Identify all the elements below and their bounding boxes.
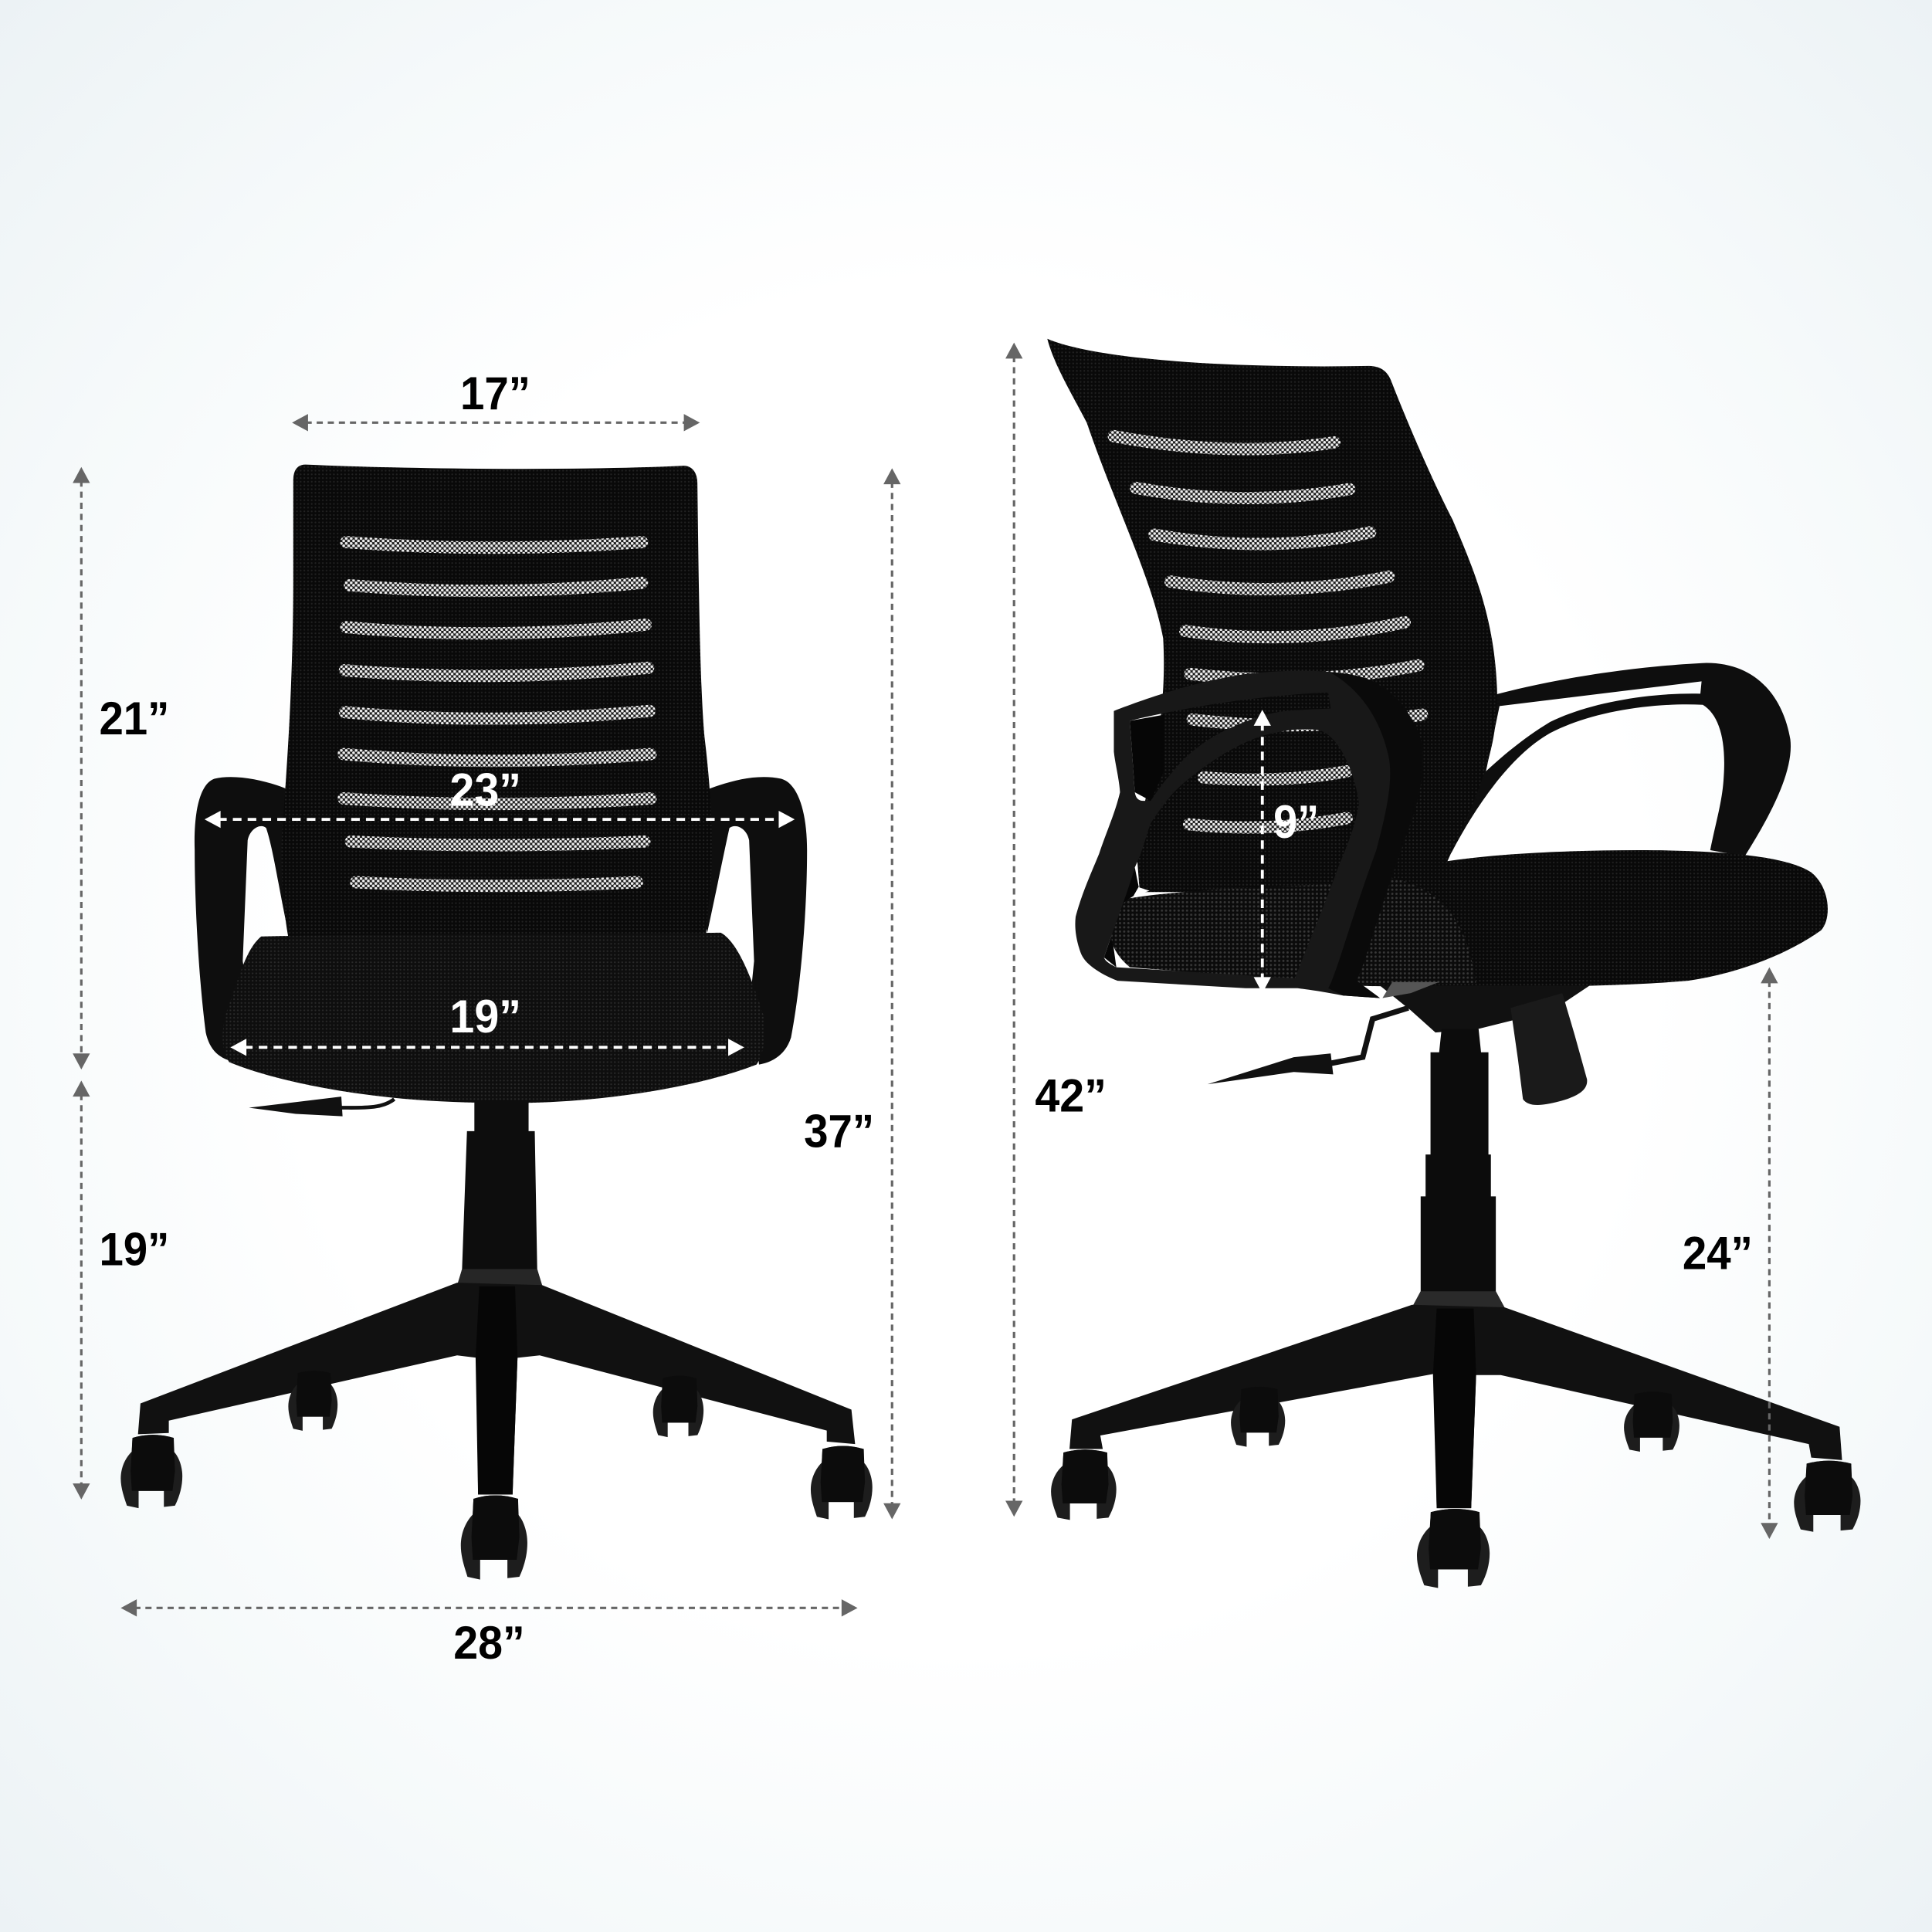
front chair right arm	[695, 777, 807, 1065]
side chair back casters	[1231, 1387, 1679, 1452]
dimension: back width 17 inches: 17”	[460, 367, 530, 419]
side chair gas lift column	[1412, 1029, 1504, 1307]
dimension: total front height 37 inches: 37”	[804, 1105, 874, 1158]
front chair collar	[457, 1269, 542, 1285]
front chair mesh slots	[344, 542, 651, 886]
side chair tension knob	[1510, 993, 1587, 1105]
dimension: total side height 42 inches	[1005, 343, 1107, 1517]
side chair near arm	[1075, 671, 1423, 998]
dimension: seat height 19 inches: 19”	[99, 1223, 169, 1276]
side chair mesh slots	[1113, 436, 1422, 828]
dimension: arm height 9 inches: 9”	[1273, 795, 1319, 848]
dimension: base width 28 inches	[120, 1599, 858, 1669]
side chair collar	[1412, 1291, 1504, 1307]
dimension: backrest height 21 inches	[73, 467, 169, 1069]
side chair backrest	[1047, 339, 1497, 892]
side chair far arm	[1417, 663, 1791, 856]
side chair seat near side panel	[1111, 877, 1476, 986]
side chair star base	[1069, 1305, 1842, 1508]
side chair seat mechanism	[1380, 982, 1589, 1032]
side chair near arm outer side	[1328, 673, 1423, 998]
dimension: total side height 42 inches: 42”	[1035, 1069, 1107, 1121]
side chair height lever	[1208, 1008, 1408, 1084]
front chair gas lift column	[457, 1100, 542, 1286]
front chair back casters	[288, 1371, 703, 1437]
dimension: seat width 19 inches	[230, 990, 744, 1056]
front chair height lever	[249, 1096, 395, 1117]
dimension: seat height 19 inches	[73, 1080, 169, 1500]
front chair seat	[222, 933, 765, 1103]
dimension: arm height 9 inches	[1254, 710, 1319, 993]
dimension: back width 17 inches	[292, 367, 700, 431]
dimension: total front height 37 inches	[804, 468, 900, 1519]
panel: side view chair	[1047, 339, 1860, 1588]
dimension: arm width 23 inches: 23”	[449, 764, 521, 816]
front chair front casters	[120, 1435, 873, 1580]
dimension: raised seat height 24 inches	[1683, 968, 1778, 1539]
front chair star base	[138, 1283, 855, 1495]
panel: front view chair	[120, 465, 873, 1580]
dimension: base width 28 inches: 28”	[453, 1616, 525, 1669]
side chair front casters	[1051, 1449, 1860, 1588]
side chair dark frame interior	[1104, 714, 1164, 968]
dimension: seat width 19 inches: 19”	[449, 990, 521, 1042]
dimension: arm width 23 inches	[205, 764, 795, 828]
dimension: raised seat height 24 inches: 24”	[1683, 1227, 1753, 1280]
front chair backrest	[281, 465, 712, 949]
front chair left arm	[195, 777, 300, 1062]
side chair seat gap	[1134, 887, 1150, 896]
side chair seat	[1281, 850, 1828, 987]
dimension: backrest height 21 inches: 21”	[99, 692, 169, 744]
